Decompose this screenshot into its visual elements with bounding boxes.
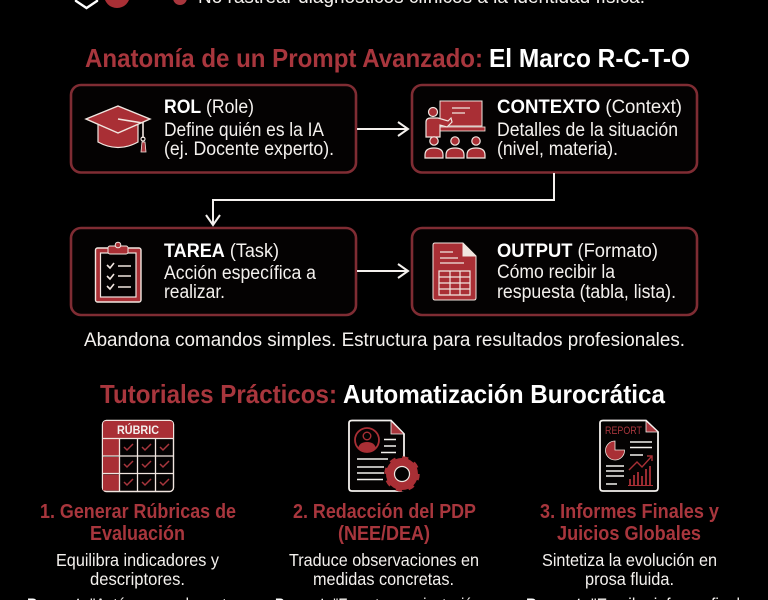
column: informes (526, 420, 740, 600)
OUTPUT text (497, 241, 676, 303)
icon: report document (600, 420, 658, 491)
panel: ROL (71, 85, 356, 172)
informes title: 3. Informes Finales y (540, 501, 720, 523)
PDP title: (NEE/DEA) (338, 523, 430, 545)
OUTPUT text: OUTPUT (Formato) (497, 241, 658, 262)
arrow: TAREA to OUTPUT (357, 264, 408, 278)
OUTPUT text: respuesta (tabla, lista). (497, 282, 676, 303)
CONTEXTO text: Detalles de la situación (497, 120, 678, 141)
icon: rubric table: RÚBRIC (117, 422, 159, 437)
OUTPUT text: Cómo recibir la (497, 262, 615, 283)
rúbricas title (40, 501, 236, 545)
top fragment: privacy rule (76, 0, 645, 8)
heading: Anatomía de un Prompt: El Marco R-C-T-O (489, 43, 690, 73)
arrow: ROL to CONTEXTO (357, 122, 408, 136)
icon: red circle (104, 0, 130, 8)
caption: Abandona comandos simples. Estructura para resultados profesionales. (84, 330, 685, 351)
heading: Tutoriales Prácticos: Tutoriales Prácticos: (100, 379, 337, 409)
icon: clipboard checklist (96, 242, 141, 302)
icon: shield (76, 0, 97, 8)
bullet (173, 0, 187, 5)
ROL text: (ej. Docente experto). (164, 139, 334, 160)
PDP title: 2. Redacción del PDP (293, 501, 476, 523)
TAREA text: TAREA (Task) (164, 241, 279, 262)
panel: TAREA (71, 228, 356, 315)
ROL text (164, 97, 334, 160)
panel: CONTEXTO (412, 85, 697, 172)
TAREA text (164, 241, 316, 303)
column: PDP (275, 420, 480, 600)
CONTEXTO text (497, 97, 682, 160)
informes description: prosa fluida. (585, 569, 674, 589)
icon: rubric table (102, 420, 174, 492)
PDP description: medidas concretas. (313, 569, 454, 589)
arrow: CONTEXTO to TAREA (206, 173, 554, 225)
CONTEXTO text: (nivel, materia). (497, 139, 618, 160)
PDP description (289, 550, 479, 589)
rúbricas title: 1. Generar Rúbricas de (40, 501, 236, 523)
rúbricas description: Equilibra indicadores y (56, 550, 219, 570)
heading: Anatomía de un Prompt: Anatomía de un Prompt Avanzado: (85, 43, 483, 73)
CONTEXTO text: CONTEXTO (Context) (497, 97, 682, 118)
column: rúbricas (27, 420, 236, 600)
icon: graduation cap (86, 106, 150, 152)
rúbricas title: Evaluación (90, 523, 185, 545)
rúbricas description (56, 550, 219, 589)
PDP description: Traduce observaciones en (289, 550, 479, 570)
heading: Tutoriales Prácticos: Automatización Burocrática (343, 379, 665, 409)
icon: report document: REPORT (605, 425, 642, 437)
informes description (542, 550, 717, 589)
icon: document with table (433, 243, 476, 300)
heading: Tutoriales Prácticos (100, 379, 665, 409)
rúbricas description: descriptores. (90, 569, 185, 589)
icon: teacher at board (425, 101, 485, 158)
panel: OUTPUT (412, 228, 697, 315)
informes title (540, 501, 720, 545)
TAREA text: Acción específica a (164, 263, 316, 284)
informes title: Juicios Globales (557, 523, 701, 545)
ROL text: ROL (Role) (164, 97, 254, 118)
ROL text: Define quién es la IA (164, 120, 324, 141)
TAREA text: realizar. (164, 282, 225, 303)
icon: document with gear (349, 420, 420, 492)
informes description: Sintetiza la evolución en (542, 550, 717, 570)
PDP title (293, 501, 476, 545)
